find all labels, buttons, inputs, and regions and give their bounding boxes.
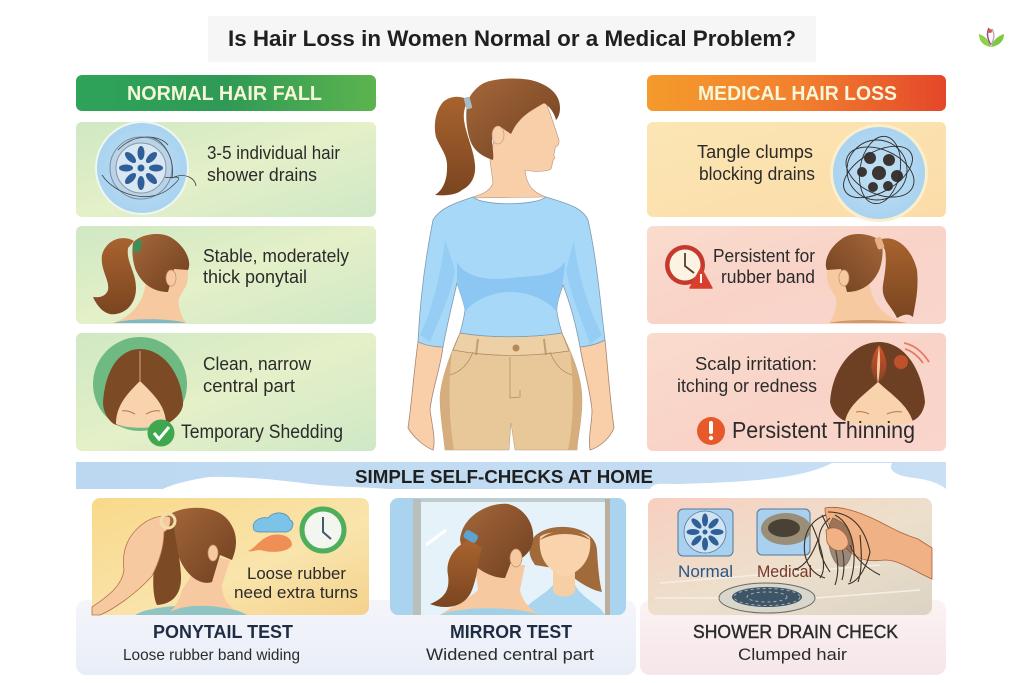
icon: clock with warning xyxy=(665,245,712,288)
text: need extra turns xyxy=(234,583,358,602)
text: Persistent for xyxy=(713,246,815,266)
icon: head with narrow part xyxy=(93,337,187,431)
neck and face xyxy=(470,103,559,198)
card: persistent rubber band xyxy=(647,226,946,324)
card: shower drain check xyxy=(648,498,932,664)
hair tie xyxy=(464,96,472,110)
hair xyxy=(466,78,560,160)
ponytail xyxy=(435,97,475,195)
heading: self-checks band xyxy=(76,462,946,489)
text: thick ponytail xyxy=(203,267,307,287)
mirror xyxy=(413,499,610,615)
heading: normal hair fall: NORMAL HAIR FALL xyxy=(127,83,322,105)
icon: green check xyxy=(148,420,174,446)
label: medical: Medical xyxy=(757,562,812,581)
icon: ponytail head xyxy=(93,234,189,323)
icon: irritated scalp xyxy=(830,342,929,425)
card: tangled clumps xyxy=(647,122,946,222)
panel: medical hair loss xyxy=(647,75,946,451)
heading: medical hair loss xyxy=(647,75,946,111)
shirt xyxy=(418,197,605,347)
text: Scalp irritation: xyxy=(695,354,817,374)
card: ponytail test xyxy=(92,498,369,664)
heading: self-checks band: SIMPLE SELF-CHECKS AT HOME xyxy=(355,467,653,487)
label: normal: Normal xyxy=(678,562,733,581)
icon: clogged drain xyxy=(830,124,928,222)
illustration: reflection xyxy=(520,527,605,615)
text: Tangle clumps xyxy=(697,142,813,162)
heading: medical hair loss: MEDICAL HAIR LOSS xyxy=(698,83,897,105)
icon: logo xyxy=(979,28,1004,47)
label: mirror test: MIRROR TEST xyxy=(450,622,572,642)
text xyxy=(207,143,340,185)
icon: clean drain xyxy=(95,121,196,215)
icon: cloud xyxy=(253,513,293,532)
card: scalp irritation and persistent thinning xyxy=(647,333,946,451)
card: central part and temporary shedding xyxy=(76,333,376,451)
card: mirror test xyxy=(390,498,626,664)
label: shower drain check xyxy=(693,622,898,664)
text xyxy=(697,142,815,184)
label: ponytail test: Loose rubber band widing xyxy=(123,647,300,664)
label: ponytail test: PONYTAIL TEST xyxy=(153,622,293,642)
card: stable ponytail xyxy=(76,226,376,324)
icon: orange scalp patch xyxy=(248,535,292,552)
text: Clean, narrow xyxy=(203,354,312,374)
text xyxy=(234,564,358,602)
text: 3-5 individual hair xyxy=(207,143,340,163)
illustration: hand holding hair xyxy=(795,507,932,585)
pants xyxy=(440,333,582,450)
text: Stable, moderately xyxy=(203,246,349,266)
text xyxy=(203,354,312,396)
illustration: hand and ponytail xyxy=(92,508,247,615)
text: shower drains xyxy=(207,165,317,185)
label: temporary shedding: Temporary Shedding xyxy=(181,422,343,443)
arms xyxy=(408,340,614,450)
icon: clock cycle xyxy=(302,509,344,551)
text xyxy=(203,246,349,287)
label: shower drain check: SHOWER DRAIN CHECK xyxy=(693,622,898,642)
label: shower drain check: Clumped hair xyxy=(738,645,847,664)
panel: simple self-checks at home xyxy=(76,462,946,675)
panel: normal hair fall xyxy=(76,75,376,451)
icon: warning circle xyxy=(697,417,725,445)
figure: woman xyxy=(408,78,614,450)
icon: normal tile xyxy=(678,509,733,556)
text: rubber band xyxy=(721,267,815,287)
icon: medical tile xyxy=(757,509,811,555)
text xyxy=(677,354,817,396)
heading: normal hair fall xyxy=(76,75,376,111)
title xyxy=(208,16,816,62)
text: Loose rubber xyxy=(247,564,346,583)
text: central part xyxy=(203,376,295,396)
lower backgrounds xyxy=(76,600,946,675)
label: ponytail test xyxy=(123,622,300,664)
label: persistent thinning: Persistent Thinning xyxy=(732,417,915,443)
card: shower drain normal xyxy=(76,121,376,217)
text xyxy=(713,246,815,287)
illustration: woman from behind xyxy=(430,504,540,615)
title: Is Hair Loss in Women Normal or a Medical Problem? xyxy=(228,26,796,51)
text: blocking drains xyxy=(699,164,815,184)
text: itching or redness xyxy=(677,376,817,396)
icon: ponytail head xyxy=(826,234,918,323)
label: mirror test xyxy=(426,622,594,664)
label: mirror test: Widened central part xyxy=(426,645,594,664)
floor drain xyxy=(655,565,920,613)
